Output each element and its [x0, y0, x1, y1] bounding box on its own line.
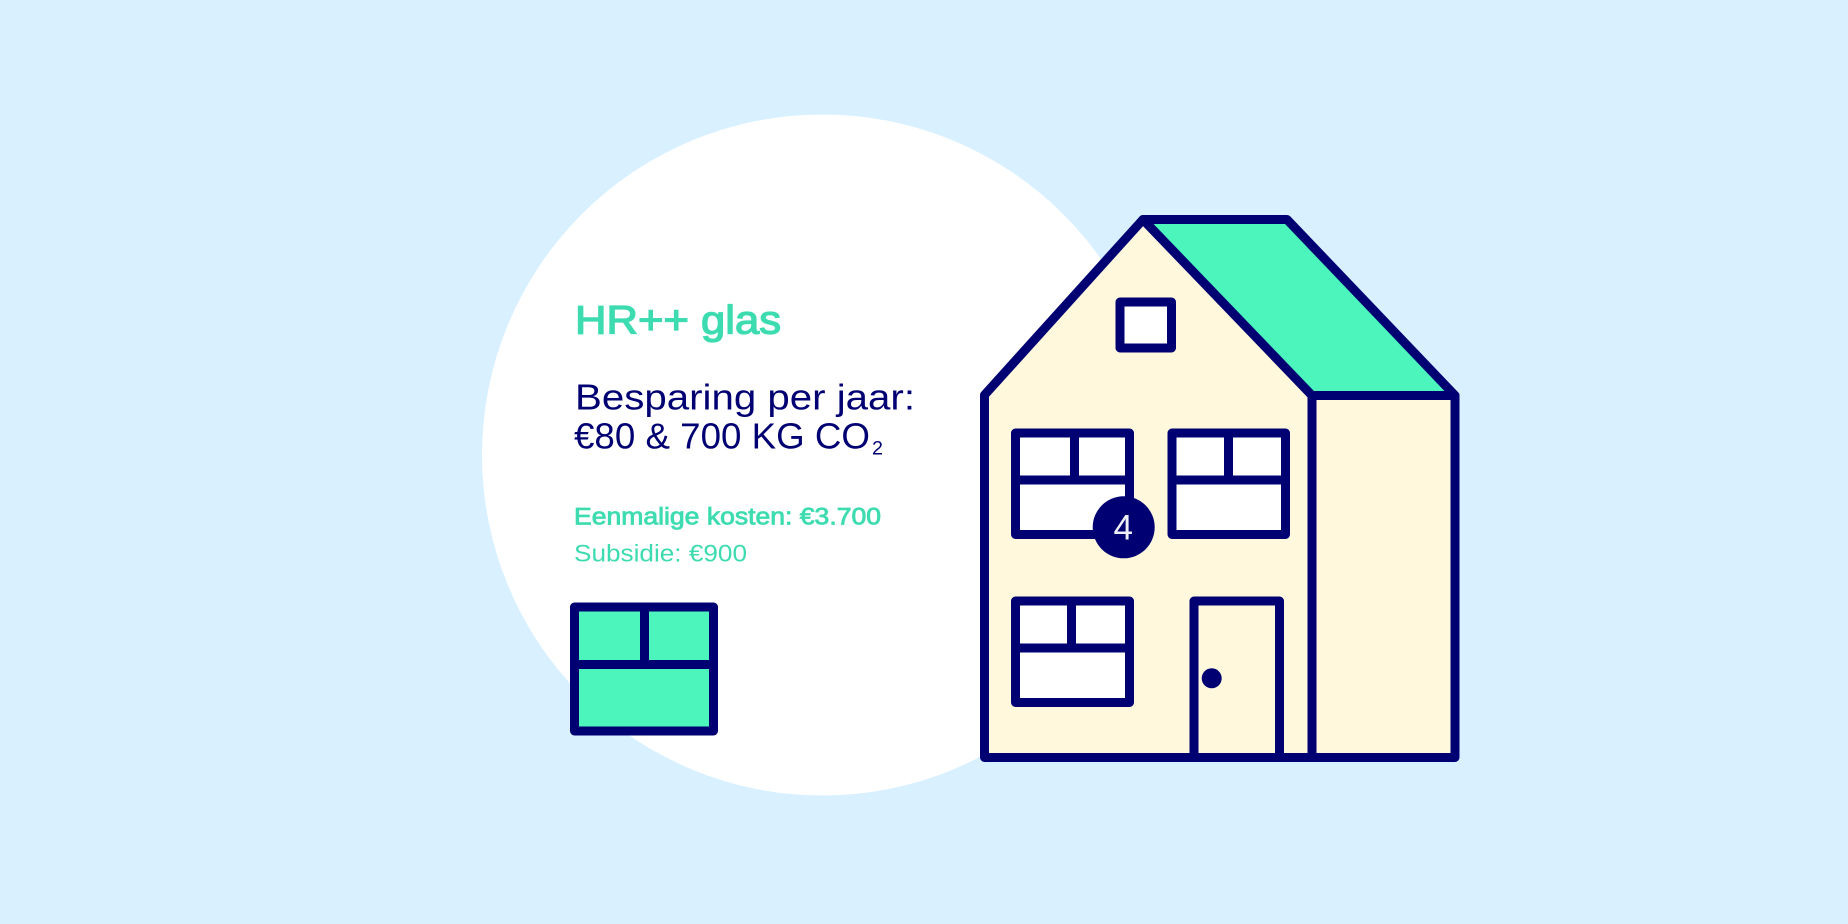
upper right window [1172, 433, 1286, 534]
front door [1194, 601, 1280, 758]
number badge 4: 4 [1113, 508, 1133, 547]
savings per year: €80 & 700 KG CO [574, 416, 870, 456]
icon: green glazed window [574, 607, 714, 731]
subsidy: Subsidie: €900 [574, 540, 747, 568]
heading: HR++ glas [575, 298, 781, 342]
savings per year: Besparing per jaar: [575, 376, 915, 418]
number badge 4 [1093, 496, 1155, 558]
savings per year: 2 [872, 438, 883, 460]
door knob [1202, 668, 1222, 688]
upper left window [1016, 433, 1130, 534]
house front facade [984, 220, 1312, 758]
attic window [1120, 302, 1172, 348]
house illustration [984, 220, 1455, 758]
house side wall [1312, 396, 1455, 758]
text block: measure details [574, 298, 915, 568]
lower left window [1016, 601, 1130, 702]
one-time costs: Eenmalige kosten: €3.700 [574, 504, 881, 530]
savings per year [574, 376, 915, 460]
white background circle [482, 114, 1163, 796]
green roof [1143, 220, 1455, 396]
